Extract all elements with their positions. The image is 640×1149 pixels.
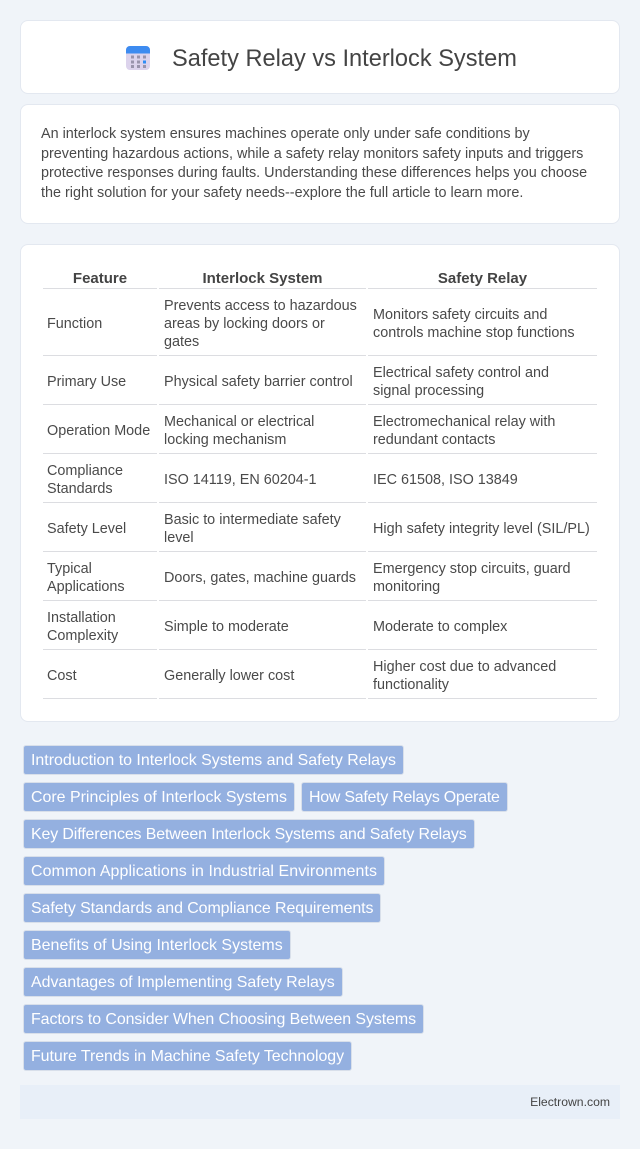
- tag: [23, 819, 475, 849]
- row: Function: Monitors safety circuits and: [373, 307, 547, 323]
- row: Installation Complexity: Installation: [47, 610, 116, 626]
- tag: Introduction to Interlock Systems and Safety Relays: [31, 752, 396, 769]
- row: Operation Mode: Operation Mode: [47, 423, 150, 439]
- row: Function: controls machine stop functions: [373, 325, 575, 341]
- row: Compliance Standards: ISO 14119, EN 60204-1: [164, 472, 317, 488]
- tag: [23, 1041, 352, 1071]
- row: Compliance Standards: [47, 463, 518, 497]
- row: Operation Mode: Mechanical or electrical: [164, 414, 314, 430]
- row: Function: [47, 298, 575, 350]
- footer source text: Electrown.com: [530, 1095, 610, 1109]
- row: Typical Applications: Doors, gates, machine guards: [164, 570, 356, 586]
- row: Safety Level: Basic to intermediate safety: [164, 512, 341, 528]
- table header: Feature: [73, 270, 127, 287]
- intro paragraph: [41, 126, 587, 200]
- tag: How Safety Relays Operate: [309, 789, 500, 806]
- row: Installation Complexity: Simple to moderate: [164, 619, 289, 635]
- row: Operation Mode: [47, 414, 555, 448]
- row: Compliance Standards: Standards: [47, 481, 113, 497]
- row: Primary Use: [47, 365, 549, 399]
- table header: Interlock System: [202, 270, 323, 287]
- comparison table panel: [20, 244, 620, 722]
- row: Primary Use: Primary Use: [47, 374, 126, 390]
- table header: Safety Relay: [438, 270, 527, 287]
- tag: Core Principles of Interlock Systems: [31, 789, 287, 806]
- topic tag list: [23, 745, 508, 1071]
- row: Operation Mode: locking mechanism: [164, 432, 286, 448]
- row: Operation Mode: redundant contacts: [373, 432, 495, 448]
- icon: calendar grid: [126, 46, 150, 70]
- tag: [23, 967, 343, 997]
- table header: [73, 270, 527, 287]
- tag: Benefits of Using Interlock Systems: [31, 937, 283, 954]
- intro paragraph: An interlock system ensures machines operate only under safe conditions by: [41, 126, 530, 142]
- tag: Future Trends in Machine Safety Technology: [31, 1048, 344, 1065]
- row: Compliance Standards: Compliance: [47, 463, 123, 479]
- intro paragraph: the right solution for your safety needs--explore the full article to learn more.: [41, 184, 523, 200]
- tag: [23, 1004, 424, 1034]
- row: Cost: Generally lower cost: [164, 668, 294, 684]
- row: Primary Use: Electrical safety control and: [373, 365, 549, 381]
- intro paragraph: protective responses during faults. Understanding these differences helps you choose: [41, 165, 587, 181]
- tag: Advantages of Implementing Safety Relays: [31, 974, 335, 991]
- row: Function: Function: [47, 316, 102, 332]
- row: Safety Level: Safety Level: [47, 521, 126, 537]
- tag: Common Applications in Industrial Environments: [31, 863, 377, 880]
- row: Installation Complexity: Complexity: [47, 628, 118, 644]
- intro paragraph: preventing hazardous actions, while a safety relay monitors safety inputs and triggers: [41, 146, 583, 162]
- row: Function: gates: [164, 334, 199, 350]
- tag: [301, 782, 508, 812]
- row: Function: areas by locking doors or: [164, 316, 325, 332]
- row: Typical Applications: [47, 561, 571, 595]
- intro text panel: [20, 104, 620, 224]
- tag: [23, 893, 381, 923]
- row: Safety Level: level: [164, 530, 194, 546]
- row: Typical Applications: Typical: [47, 561, 92, 577]
- tag: [23, 745, 404, 775]
- tag: Factors to Consider When Choosing Between Systems: [31, 1011, 416, 1028]
- row: Function: Prevents access to hazardous: [164, 298, 357, 314]
- row: Cost: Higher cost due to advanced: [373, 659, 556, 675]
- tag: Key Differences Between Interlock Systems and Safety Relays: [31, 826, 467, 843]
- row: Typical Applications: monitoring: [373, 579, 440, 595]
- row: Cost: Cost: [47, 668, 77, 684]
- header card: [20, 20, 620, 94]
- row: Cost: [47, 659, 556, 693]
- row: Typical Applications: Applications: [47, 579, 125, 595]
- tag: [23, 930, 291, 960]
- title: Safety Relay vs Interlock System: [172, 46, 517, 72]
- tag: [23, 782, 295, 812]
- row: Installation Complexity: Moderate to complex: [373, 619, 507, 635]
- tag: Safety Standards and Compliance Requirements: [31, 900, 373, 917]
- row: Installation Complexity: [47, 610, 508, 644]
- footer bar: [20, 1085, 620, 1119]
- row: Operation Mode: Electromechanical relay with: [373, 414, 555, 430]
- row: Safety Level: [47, 512, 590, 546]
- row: Primary Use: signal processing: [373, 383, 484, 399]
- row: Safety Level: High safety integrity level (SIL/PL): [373, 521, 590, 537]
- row: Typical Applications: Emergency stop circuits, guard: [373, 561, 571, 577]
- tag: [23, 856, 385, 886]
- row: Compliance Standards: IEC 61508, ISO 13849: [373, 472, 518, 488]
- row: Cost: functionality: [373, 677, 449, 693]
- row: Primary Use: Physical safety barrier control: [164, 374, 353, 390]
